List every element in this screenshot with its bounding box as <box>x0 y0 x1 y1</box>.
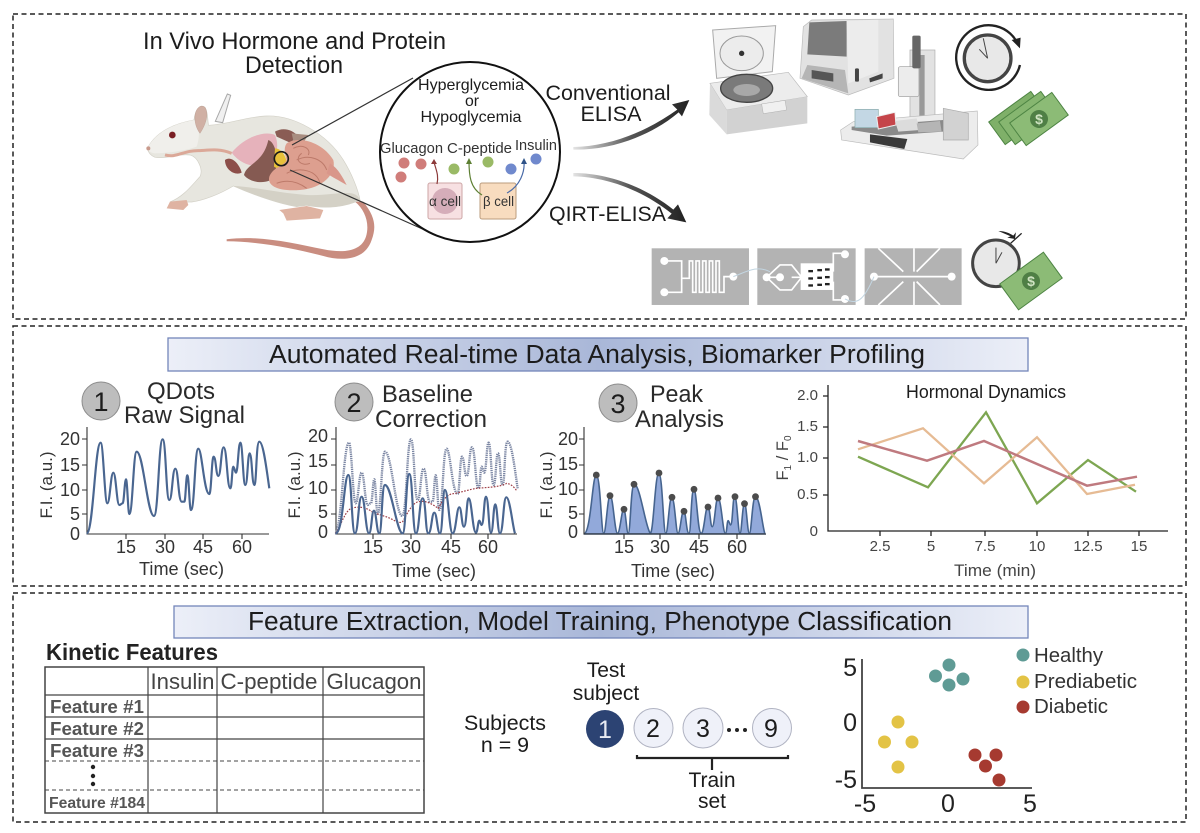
secretion arrows <box>431 158 527 195</box>
tick labels <box>774 387 1147 580</box>
line: green series <box>858 412 1136 503</box>
node labels: 3 <box>696 715 710 743</box>
tick labels: 45 <box>689 537 709 557</box>
scatter axes <box>862 659 1032 788</box>
heading: raw signal: Raw Signal <box>124 402 245 429</box>
tick labels: 10 <box>558 479 578 499</box>
tick labels: 10 <box>308 478 328 498</box>
labels: hormones: Glucagon <box>380 141 443 157</box>
tick labels: 5 <box>70 504 80 524</box>
tick labels: 1.5 <box>797 418 818 435</box>
badge: step 1 <box>82 382 120 420</box>
line: orange series <box>858 428 1135 494</box>
illustration: plate reader <box>800 19 894 95</box>
step 2: baseline correction chart <box>285 381 518 581</box>
axes <box>823 385 1168 536</box>
label: subjects <box>464 711 546 757</box>
zoom lines from pancreas to detail circle <box>290 78 427 231</box>
tick labels: 0 <box>810 523 818 540</box>
tick labels: 15 <box>363 537 383 557</box>
tick labels: Time (sec) <box>392 561 476 581</box>
badge: step 3: 3 <box>610 389 626 419</box>
icon: stack of money <box>989 91 1068 146</box>
labels: hormones: Insulin <box>515 138 557 154</box>
label: subjects: n = 9 <box>481 733 529 757</box>
tick labels: 45 <box>193 537 213 557</box>
line: corrected signal <box>336 474 515 533</box>
title: in vivo detection: In Vivo Hormone and Protein <box>143 29 446 55</box>
tick labels: 15 <box>116 537 136 557</box>
nodes: train subjects <box>634 708 792 748</box>
points: prediabetic <box>878 716 918 774</box>
scatter tick labels <box>835 654 1037 818</box>
illustration: mouse with organs <box>146 94 374 259</box>
tick labels: 15 <box>614 537 634 557</box>
arrow: to QIRT-ELISA chips <box>573 173 686 222</box>
heading: peak analysis <box>635 381 724 433</box>
alpha cell <box>428 183 462 219</box>
axes <box>579 427 766 539</box>
tick labels: Time (sec) <box>139 559 224 579</box>
tick labels: F.I. (a.u.) <box>37 451 56 519</box>
bracket: train set <box>637 755 788 770</box>
scatter tick labels: 0 <box>843 709 857 737</box>
tick labels: F.I. (a.u.) <box>537 451 556 519</box>
tick labels: 0 <box>783 435 794 441</box>
tick labels: 1.0 <box>797 449 818 466</box>
label: conventional ELISA: ELISA <box>580 102 642 126</box>
tick labels: 0 <box>318 522 328 542</box>
tick labels: 0 <box>70 524 80 544</box>
node labels: 2 <box>646 715 660 743</box>
arrow: to conventional equipment <box>573 100 689 150</box>
scatter tick labels: -5 <box>854 790 876 818</box>
text: glycemia condition: Hypoglycemia <box>420 109 522 126</box>
legend: Healthy <box>1034 644 1104 667</box>
tick labels: 60 <box>232 537 252 557</box>
tick labels: 30 <box>650 537 670 557</box>
badge: step 2 <box>335 383 373 421</box>
tick labels: 30 <box>155 537 175 557</box>
points: diabetic <box>968 748 1006 786</box>
legend: Diabetic <box>1034 695 1108 718</box>
text: glycemia condition: or <box>465 93 479 110</box>
label: test subject: Test <box>587 659 625 682</box>
points: healthy <box>929 658 970 692</box>
scatter tick labels: -5 <box>835 766 857 794</box>
beta cell <box>480 183 516 219</box>
table column headers: C-peptide <box>220 669 318 694</box>
tick labels: 0 <box>568 522 578 542</box>
tick labels: 5 <box>568 503 578 523</box>
badge: step 2: 2 <box>346 388 362 418</box>
node: test subject 1 <box>586 710 624 748</box>
table column headers <box>150 669 422 694</box>
tick labels: 20 <box>308 426 328 446</box>
tick labels: 12.5 <box>1073 538 1103 555</box>
legend: Prediabetic <box>1034 670 1137 693</box>
line: raw dotted signal <box>335 439 518 533</box>
line: baseline <box>336 483 517 533</box>
heading: peak analysis: Peak <box>650 381 704 408</box>
scatter tick labels: 0 <box>941 790 955 818</box>
table row headers: Feature #2 <box>50 718 144 739</box>
illustration: centrifuge <box>709 26 807 134</box>
tick labels: 15 <box>558 454 578 474</box>
tick labels: 10 <box>1029 538 1045 555</box>
table row headers: Feature #184 <box>49 795 145 812</box>
table column headers: Glucagon <box>326 669 422 694</box>
tick labels: 15 <box>308 451 328 471</box>
table: kinetic features <box>45 667 424 813</box>
tick labels: 20 <box>60 429 80 449</box>
illustration: microfluidic chips <box>652 248 962 305</box>
panel: data analysis <box>13 326 1186 586</box>
heading: baseline correction <box>375 381 487 433</box>
table row headers: Feature #1 <box>50 696 144 717</box>
chart: phenotype scatter <box>835 654 1037 818</box>
legend <box>1016 644 1137 718</box>
icon: stack of money: $ <box>1035 111 1043 127</box>
tick labels: 45 <box>441 537 461 557</box>
scatter tick labels: 5 <box>843 654 857 682</box>
tick labels: 10 <box>60 480 80 500</box>
tick labels: 15 <box>1131 538 1147 555</box>
node: test subject 1: 1 <box>598 716 612 744</box>
tick labels <box>537 429 747 581</box>
title: in vivo detection <box>143 29 446 79</box>
tick labels: 2.0 <box>797 387 818 404</box>
hormone molecules <box>396 154 542 182</box>
heading: kinetic features: Kinetic Features <box>46 639 218 665</box>
panel: classification <box>13 593 1186 822</box>
heading: raw signal: QDots <box>147 378 215 405</box>
icon: single banknote <box>1000 252 1062 310</box>
tick labels: 1 <box>783 464 794 470</box>
heading: baseline correction: Correction <box>375 406 487 433</box>
icon: stopwatch <box>973 231 1022 287</box>
alpha cell: α cell <box>429 193 461 209</box>
tick labels: Time (sec) <box>631 561 715 581</box>
scatter tick labels: 5 <box>1023 790 1037 818</box>
badge: step 3 <box>599 384 637 422</box>
icon: single banknote: $ <box>1027 273 1035 289</box>
heading: baseline correction: Baseline <box>382 381 473 408</box>
label: QIRT-ELISA: QIRT-ELISA <box>549 203 666 226</box>
label: subjects: Subjects <box>464 711 546 735</box>
label: conventional ELISA: Conventional <box>546 81 670 105</box>
tick labels: F.I. (a.u.) <box>285 451 304 519</box>
tick labels: 5 <box>927 538 935 555</box>
tick labels: 20 <box>558 429 578 449</box>
label: test subject <box>573 659 639 705</box>
table row headers: Feature #3 <box>50 740 144 761</box>
tick labels: Time (min) <box>954 561 1036 580</box>
labels: hormones <box>380 138 557 157</box>
tick labels: 15 <box>60 455 80 475</box>
label: conventional ELISA <box>546 81 670 126</box>
tick labels: 60 <box>727 537 747 557</box>
axes <box>331 427 517 539</box>
table row headers <box>49 696 145 812</box>
tick labels: 60 <box>478 537 498 557</box>
chart: hormonal dynamics <box>774 381 1168 580</box>
tick labels: / F <box>774 441 792 465</box>
vertical ellipsis <box>91 765 95 786</box>
tick labels: 2.5 <box>870 538 890 555</box>
badge: step 1: 1 <box>93 387 109 417</box>
tick labels: 30 <box>401 537 421 557</box>
step 3: peak analysis chart <box>537 381 766 581</box>
axes <box>82 427 269 539</box>
label: test subject: subject <box>573 682 639 705</box>
tick labels: 7.5 <box>975 538 995 555</box>
node labels <box>646 715 778 743</box>
node labels: 9 <box>764 715 778 743</box>
line: raw signal <box>87 439 269 533</box>
table column headers: Insulin <box>150 669 214 694</box>
panel: in vivo detection <box>13 14 1186 319</box>
label: train set <box>688 769 736 813</box>
step 1: raw signal chart <box>37 378 269 579</box>
line: mauve series <box>858 441 1137 486</box>
label: train set: Train <box>688 769 736 792</box>
area: detected peaks <box>584 473 765 534</box>
heading: data analysis: Automated Real-time Data Analysis, Biomarker Profiling <box>269 339 925 369</box>
heading: raw signal <box>124 378 245 429</box>
heading: peak analysis: Analysis <box>635 406 724 433</box>
beta cell: β cell <box>483 193 514 209</box>
heading: classification: Feature Extraction, Model Training, Phenotype Classification <box>248 606 952 636</box>
heading: data analysis <box>168 338 1028 371</box>
title: in vivo detection: Detection <box>245 53 343 79</box>
text: glycemia condition <box>418 77 524 126</box>
tick labels: 5 <box>318 502 328 522</box>
callout: pancreas detail circle <box>380 62 560 242</box>
illustration: pipetting robot <box>841 36 978 159</box>
ellipsis dots <box>727 728 747 732</box>
tick labels: F <box>774 470 792 481</box>
label: train set: set <box>698 790 726 813</box>
tick labels <box>37 429 252 579</box>
tick labels: 0.5 <box>797 486 818 503</box>
labels: hormones: C-peptide <box>447 141 512 157</box>
text: glycemia condition: Hyperglycemia <box>418 77 524 94</box>
icon: clock with loop arrow <box>956 25 1021 90</box>
peak markers <box>593 470 759 515</box>
chart title: Hormonal Dynamics <box>906 381 1066 402</box>
tick labels <box>285 426 498 581</box>
